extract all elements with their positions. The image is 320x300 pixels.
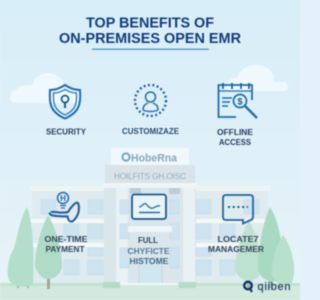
central portico: [104, 185, 196, 290]
cloud right: [226, 65, 288, 91]
icon: security shield: [50, 85, 80, 118]
icon: one-time payment hand with coin: H: [60, 194, 66, 203]
title: ON-PREMISES OPEN EMR: [59, 31, 242, 47]
label: full history: FULL: [138, 236, 158, 245]
cloud left: [10, 73, 80, 103]
label: customize: CUSTOMIZAZE: [122, 127, 179, 136]
sign name: HobeRna: [131, 152, 178, 164]
central windows: [120, 200, 179, 268]
label: full history: HISTOME: [130, 257, 168, 266]
sign subtitle: HOILFITS GH.OISC: [114, 171, 186, 181]
label: offline access: [217, 128, 253, 147]
label: offline access: ACCESS: [219, 138, 251, 147]
label: full history: [128, 236, 170, 266]
title: TOP BENEFITS OF: [86, 16, 214, 32]
icon: offline access calendar with magnifier: $: [237, 96, 243, 106]
icon: history chart screen: [132, 194, 166, 219]
icon: offline access calendar with magnifier: [218, 83, 257, 118]
title: [59, 16, 242, 47]
label: offline access: OFFLINE: [217, 128, 253, 137]
label: security: SECURITY: [46, 128, 87, 136]
label: one-time payment: PAYMENT: [46, 245, 85, 254]
icon: message bubble: [223, 195, 253, 224]
label: locate manager: MANAGEMER: [208, 245, 264, 254]
logo: qiiben: qiiben: [258, 281, 290, 293]
entrance door: [139, 258, 162, 286]
trees right: [235, 207, 294, 288]
label: locate manager: [208, 235, 264, 254]
steps: [120, 283, 180, 286]
title underline: [92, 48, 209, 50]
building: [30, 148, 270, 290]
icon: one-time payment hand with coin: [50, 192, 79, 222]
label: one-time payment: ONE-TIME: [44, 235, 88, 244]
building wings: [32, 190, 268, 290]
sign upper: [111, 148, 189, 165]
windows: [41, 200, 259, 275]
label: full history: CHYFICTE: [128, 247, 170, 256]
label: locate manager: LOCATE7: [218, 235, 258, 244]
trees left: [8, 207, 62, 289]
ground: [0, 282, 300, 300]
icon: customize person in dotted ring: [135, 85, 166, 116]
label: one-time payment: [44, 235, 88, 254]
sign lower: [105, 165, 195, 184]
